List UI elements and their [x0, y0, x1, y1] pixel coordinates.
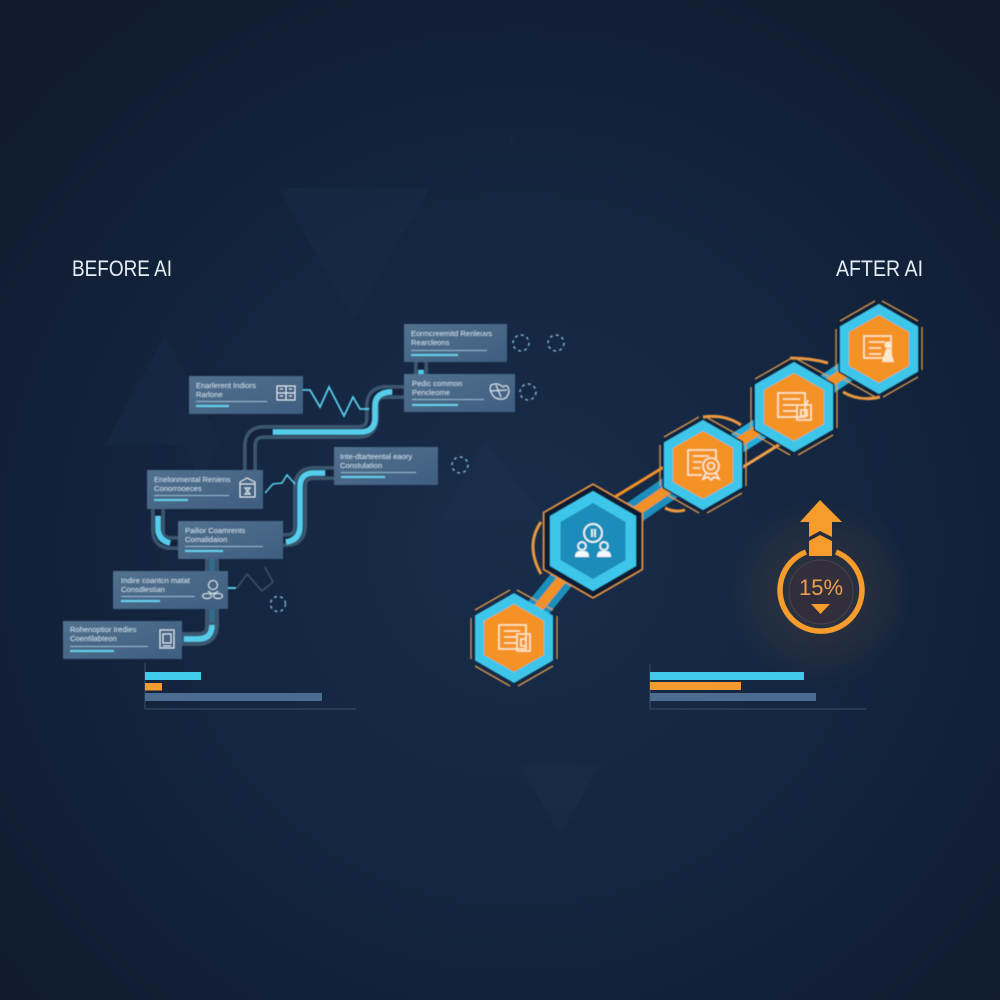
card: enarlerent indiors [189, 376, 303, 414]
hexagon 1: report [471, 590, 557, 686]
pipes between cards [158, 362, 421, 639]
progress ring [780, 552, 862, 631]
15 percent callout [726, 497, 916, 687]
card: pedic common: Pedic common [412, 379, 462, 388]
glow [726, 497, 916, 687]
card: indire consultation [113, 571, 228, 609]
arrow up [800, 500, 842, 556]
icon: people [202, 580, 222, 598]
card: indire consultation: Consdlestian [121, 585, 165, 594]
icon: house box [240, 478, 255, 497]
card: environmental reviews [147, 470, 263, 509]
card: environmental reviews: Enelonmental Reniens [154, 475, 231, 484]
orange arcs around hexagons [533, 358, 880, 574]
card: environmental reviews top [404, 324, 507, 362]
card: environmental reviews top: Eormcreemitd Renleuvs [411, 329, 492, 338]
card: public comments [178, 521, 283, 559]
card: enarlerent indiors: Rarlone [196, 390, 223, 399]
icon: certificate ribbon [688, 450, 719, 480]
icon: grid map [277, 386, 295, 400]
card: public comments: Pailior Coamrents [185, 526, 246, 535]
card: reference consultation: Coentilabteon [70, 634, 117, 643]
card: environmental reviews top: Rearcleons [411, 338, 450, 347]
card: pedic common [404, 374, 515, 412]
before AI bar chart [145, 663, 356, 709]
down marker [811, 604, 830, 614]
icon: document with tag [778, 393, 811, 420]
value: 15% [799, 575, 843, 600]
card: enarlerent indiors: Enarlerent Indiors [196, 381, 256, 390]
card: environmental reviews: Conorrooeces [154, 484, 202, 493]
heading: before AI: BEFORE AI [72, 256, 172, 281]
card: public comments: Comalidaion [185, 535, 227, 544]
card: indire consultation: Indire coantcn matat [121, 576, 191, 585]
faint background triangles [105, 135, 600, 835]
icon: document with badge [499, 625, 530, 651]
heading: after AI: AFTER AI [836, 256, 923, 281]
card: reference consultation: Rohenoptior Iredies [70, 625, 136, 634]
icon: document and flask [864, 336, 894, 362]
hexagon 3: certificate [660, 417, 746, 513]
card: inter-departmental: Constulation [340, 461, 382, 470]
hexagon 4: document [751, 359, 837, 455]
hexagon 5: document with flask [836, 301, 922, 397]
after AI bar chart [650, 664, 866, 709]
connector bands [514, 349, 879, 638]
before AI flow diagram [63, 324, 564, 659]
card: inter-departmental: Inte-dtarteental eaory [340, 452, 412, 461]
card: reference consultation [63, 621, 182, 659]
zigzag lines [228, 387, 369, 591]
icon: leaf map [490, 384, 509, 399]
card: inter-departmental [334, 447, 438, 485]
icon: document [160, 630, 174, 648]
hexagon 2: team [544, 484, 642, 598]
dashed status circles [270, 335, 564, 612]
after AI hexagon chain [471, 301, 922, 686]
inner dial [789, 560, 853, 624]
card: pedic common: Pencleome [412, 388, 450, 397]
icon: people network [578, 524, 608, 550]
